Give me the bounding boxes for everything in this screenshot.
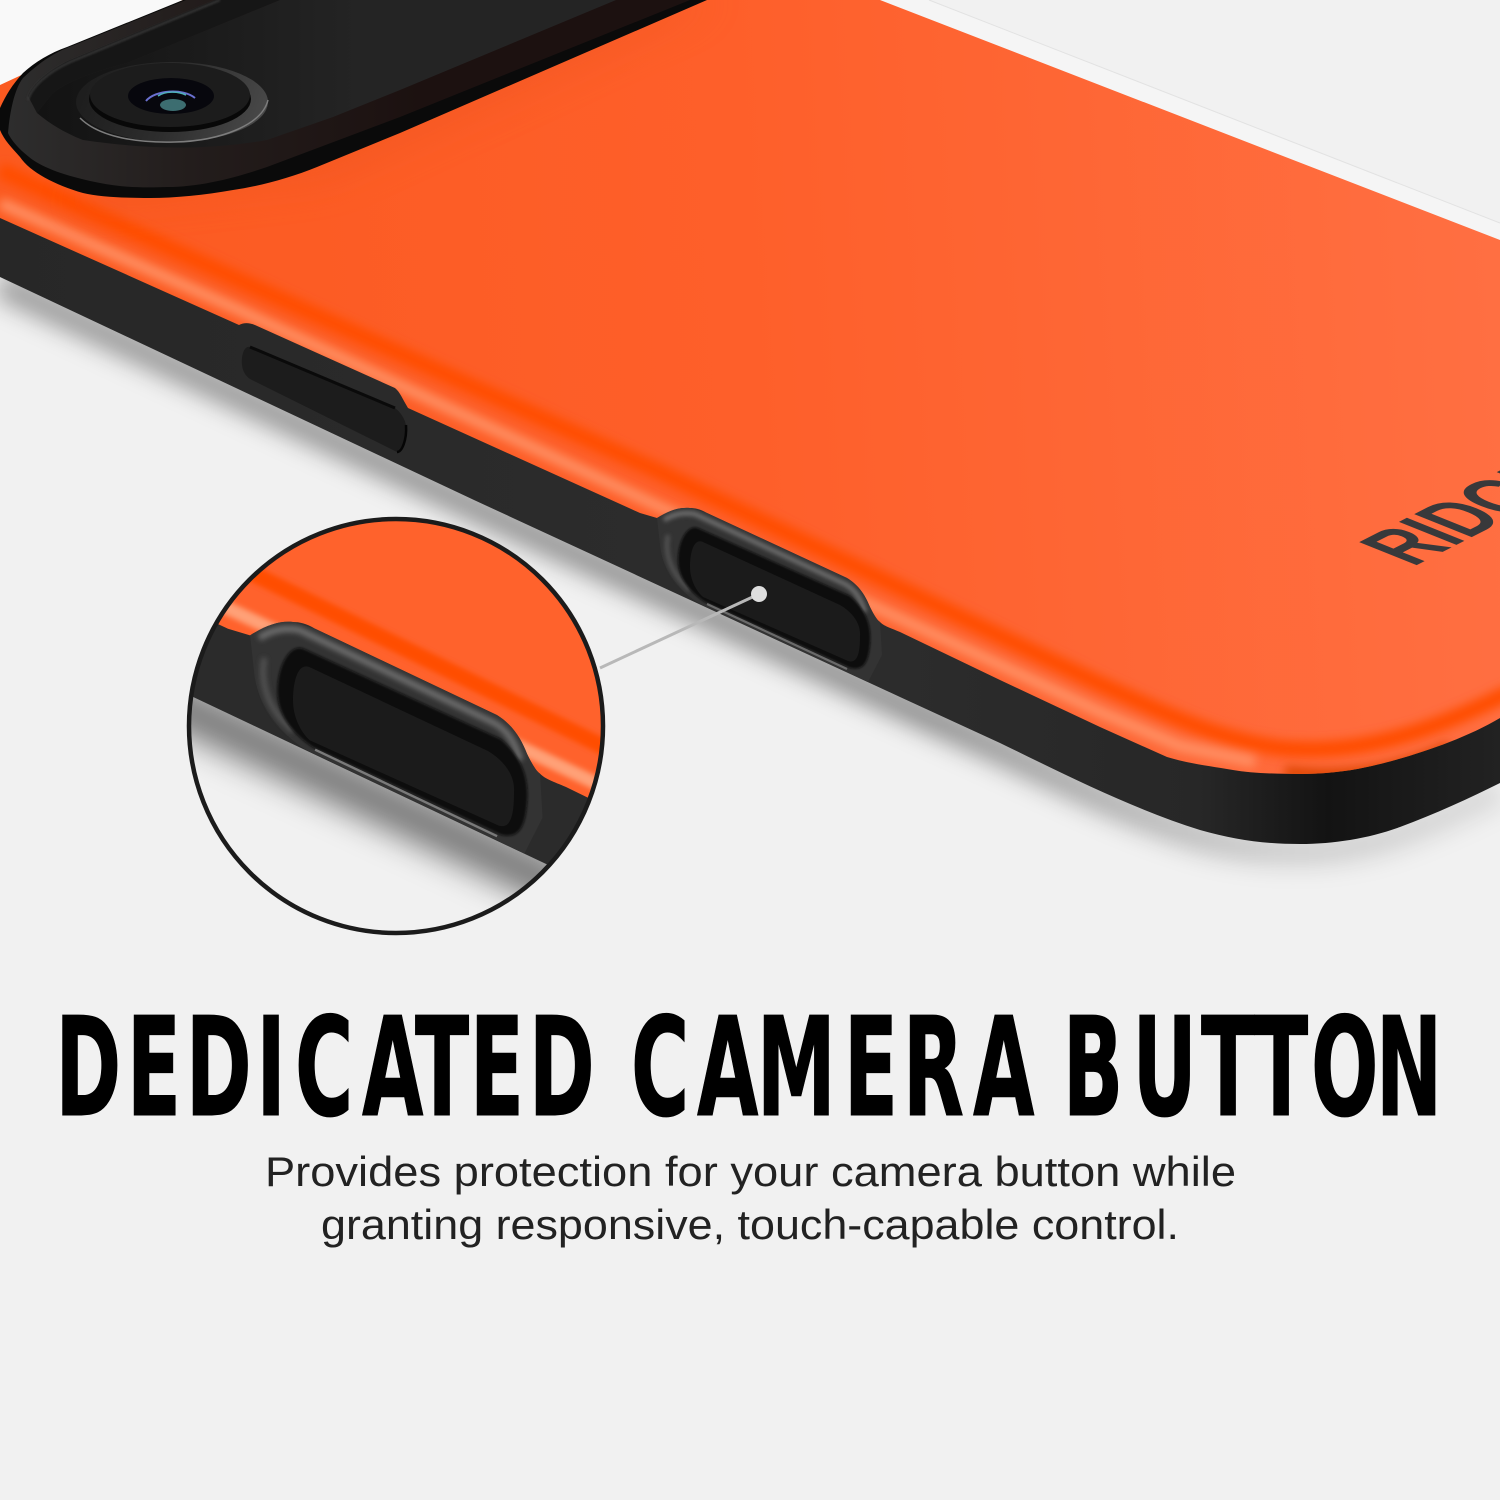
magnified callout circle — [186, 516, 606, 936]
magnified shadow — [191, 697, 547, 906]
pale backing strip top right — [880, 0, 1500, 245]
pale backing area top left — [0, 0, 190, 88]
description line 2: granting responsive, touch-capable control. — [321, 1201, 1179, 1248]
magnified black wall — [193, 622, 588, 864]
callout leader line — [600, 594, 759, 668]
magnified orange edge bands — [223, 568, 600, 791]
orange back panel — [0, 0, 1500, 774]
phone shadow — [0, 284, 1500, 851]
magnified button lower highlight — [315, 750, 497, 836]
island recessed floor — [37, 0, 616, 148]
camera button — [657, 508, 882, 682]
camera lens — [76, 62, 268, 142]
heading: DEDICATED CAMERA BUTTON — [55, 989, 1442, 1148]
magnified phone detail — [191, 521, 601, 906]
magnified button bezel — [250, 622, 543, 853]
callout ring — [189, 519, 603, 933]
edge shading — [0, 162, 1500, 774]
description line 1: Provides protection for your camera button while — [265, 1148, 1236, 1195]
phone case — [0, 0, 1500, 851]
magnified button — [293, 666, 514, 826]
volume button — [242, 347, 407, 452]
faint outline top right — [929, 0, 1500, 223]
magnified orange panel — [218, 521, 601, 798]
black side wall — [0, 100, 1500, 844]
camera island — [0, 0, 707, 198]
callout dot — [751, 586, 767, 602]
description text — [265, 1148, 1236, 1248]
